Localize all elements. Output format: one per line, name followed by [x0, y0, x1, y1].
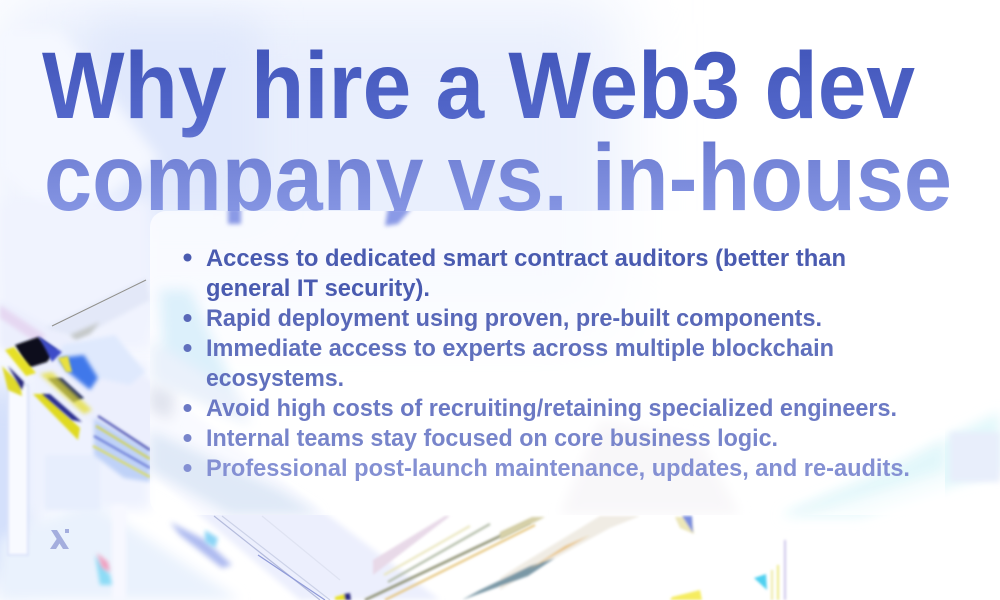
item 6: Professional post-launch maintenance, updates, and re-audits.: [206, 455, 910, 482]
item 5: Internal teams stay focused on core business logic.: [206, 425, 778, 452]
lower beam colours: [170, 522, 232, 568]
item 3: Immediate access to experts across multiple blockchain: [206, 335, 834, 362]
item 3: [184, 335, 834, 392]
item 1: Access to dedicated smart contract auditors (better than: [206, 245, 846, 272]
item 1: [184, 245, 846, 302]
glass panel: [150, 208, 945, 515]
item 2: Rapid deployment using proven, pre-built components.: [206, 305, 822, 332]
dark refraction spots: [60, 335, 145, 385]
glass crystal structure: [0, 278, 785, 600]
blurred title descenders behind the glass: [228, 208, 412, 226]
lower streaks: [214, 516, 340, 600]
glass vertical frame: [8, 385, 28, 555]
item 4: Avoid high costs of recruiting/retaining specialized engineers.: [206, 395, 897, 422]
title: [42, 50, 949, 211]
main diagonal glass beam: [0, 300, 440, 600]
title: Why hire a Web3 dev: [42, 33, 915, 139]
item 1: general IT security).: [206, 275, 430, 302]
bullet list: [184, 245, 910, 482]
item 3: ecosystems.: [206, 365, 344, 392]
blurred scene behind the glass: [150, 290, 945, 515]
icon: logo mark: [50, 529, 69, 549]
center fan streaks: [335, 516, 535, 600]
